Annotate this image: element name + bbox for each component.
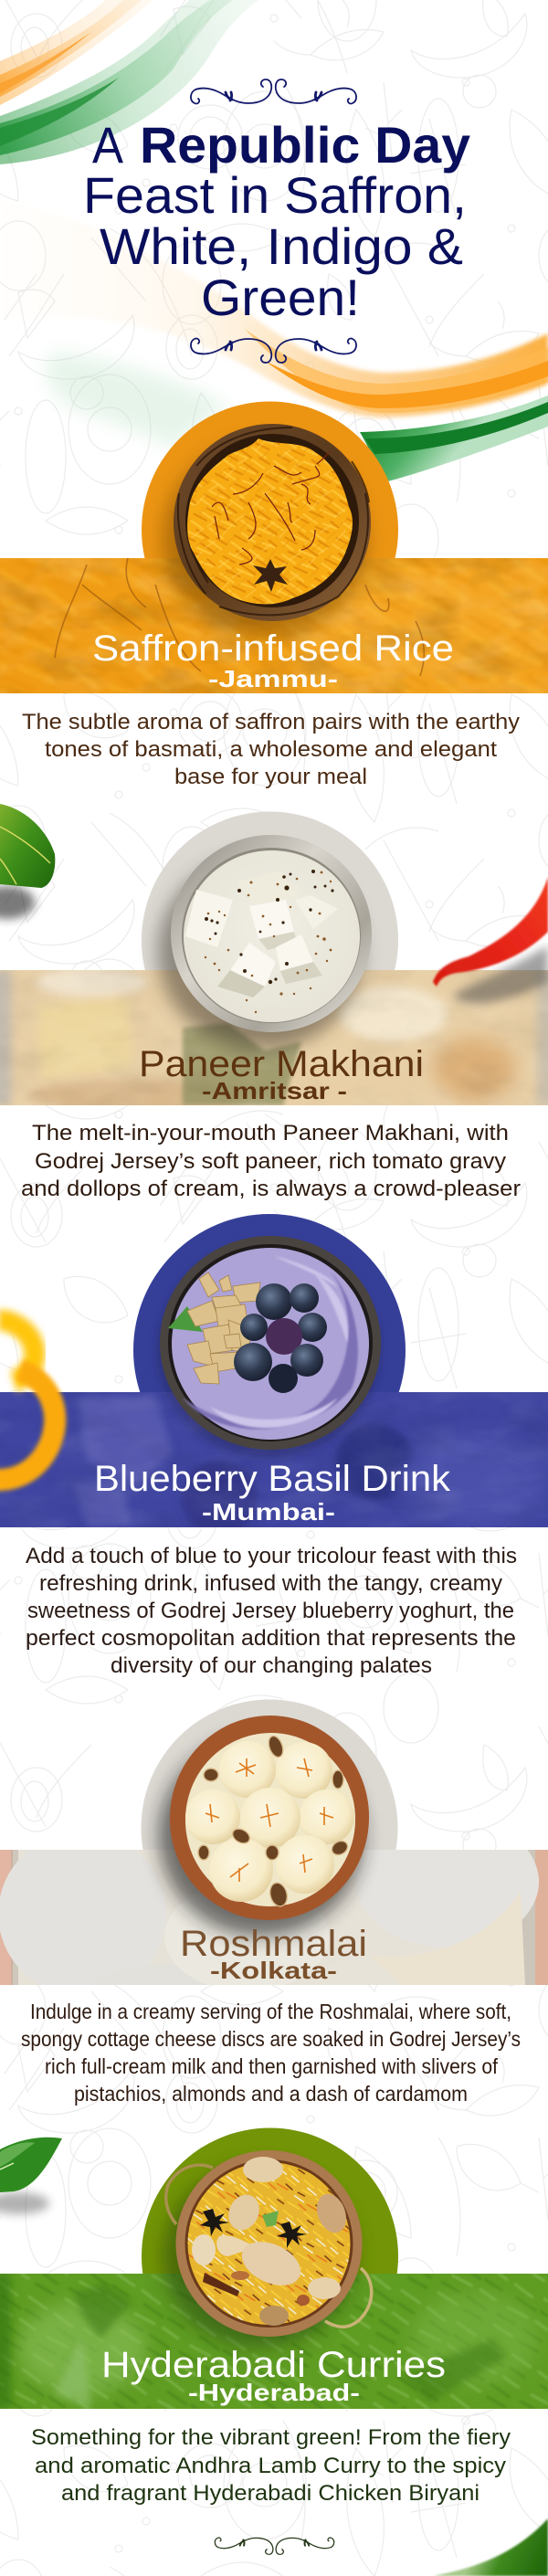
description: The melt-in-your-mouth Paneer Makhani, with — [32, 1121, 509, 1145]
cinnamon stick — [203, 2273, 239, 2296]
description: The subtle aroma of saffron pairs with the earthy — [22, 710, 520, 734]
description: and dollops of cream, is always a crowd-pleaser — [21, 1177, 521, 1201]
icon: red chilli — [433, 877, 548, 1003]
description: Godrej Jersey’s soft paneer, rich tomato gravy — [35, 1149, 506, 1174]
description — [31, 2425, 511, 2506]
bowl: roshmalai — [156, 1703, 383, 1933]
description — [21, 2000, 521, 2106]
cream balls — [185, 1741, 354, 1902]
icon: yellow pepper ring — [0, 1320, 55, 1480]
location: -Hyderabad- — [188, 2379, 360, 2406]
description — [26, 1544, 517, 1678]
blueberries — [234, 1283, 327, 1393]
panel: saffron rice — [0, 402, 548, 789]
bowl shadow — [157, 1242, 380, 1458]
location: -Kolkata- — [210, 1957, 337, 1984]
title — [83, 116, 470, 326]
handles — [166, 2165, 372, 2327]
saffron strands — [206, 1758, 333, 1882]
dish name: Saffron-infused Rice — [92, 628, 454, 669]
dish name: Roshmalai — [180, 1924, 367, 1964]
nuts — [198, 1734, 350, 1908]
backdrop circle — [142, 2128, 398, 2384]
panel: blueberry basil drink — [0, 1214, 548, 1678]
panel: paneer makhani — [0, 811, 548, 1201]
bowl shadow — [158, 855, 363, 1049]
backdrop circle — [142, 402, 398, 658]
title: Green! — [201, 269, 360, 326]
nuts — [231, 2271, 249, 2280]
location: -Jammu- — [208, 665, 338, 692]
description: sweetness of Godrej Jersey blueberry yoghurt, the — [27, 1599, 514, 1623]
star anise — [253, 559, 288, 592]
description: Add a touch of blue to your tricolour feast with this — [26, 1544, 517, 1568]
green corner swoosh — [433, 2518, 548, 2576]
basil leaf — [168, 1306, 203, 1332]
title: Republic Day — [140, 116, 470, 174]
ornament: footer flourish — [215, 2538, 334, 2554]
pepper specks — [205, 870, 334, 1013]
dish name: Blueberry Basil Drink — [94, 1459, 451, 1499]
bowl: saffron rice — [174, 424, 371, 621]
ornament: top flourish — [191, 79, 356, 103]
band: roshmalai texture — [0, 1850, 548, 1985]
band: biryani texture — [0, 2274, 548, 2409]
oats — [187, 1272, 260, 1384]
icon: basil leaf — [0, 804, 55, 919]
description — [22, 710, 520, 789]
title: White, Indigo & — [100, 217, 463, 275]
ornament: lower flourish — [191, 339, 356, 363]
dish name: Hyderabadi Curries — [101, 2345, 446, 2385]
title: A — [92, 116, 124, 174]
backdrop circle — [141, 1699, 398, 1957]
description — [21, 1121, 521, 1201]
location: -Amritsar - — [202, 1077, 347, 1104]
band: makhani gravy texture — [0, 967, 548, 1113]
drumstick — [216, 2233, 308, 2294]
tricolour swoosh: right sweep behind title — [0, 198, 548, 482]
bowl: blueberry yoghurt — [160, 1236, 381, 1450]
backdrop circle — [142, 811, 398, 1069]
description: and fragrant Hyderabadi Chicken Biryani — [61, 2481, 480, 2506]
description: perfect cosmopolitan addition that represents the — [26, 1626, 516, 1651]
description: Something for the vibrant green! From the fiery — [31, 2425, 511, 2450]
description: rich full-cream milk and then garnished with slivers of — [45, 2054, 499, 2078]
location: -Mumbai- — [202, 1498, 335, 1526]
dish name: Paneer Makhani — [139, 1044, 424, 1084]
panel: roshmalai — [0, 1699, 548, 2106]
description: refreshing drink, infused with the tangy, creamy — [39, 1571, 502, 1596]
herb — [262, 2211, 279, 2227]
bowl: paneer — [171, 835, 372, 1032]
bowl shadow — [159, 1736, 364, 1937]
panel: hyderabadi curries — [0, 2128, 548, 2506]
tricolour swoosh: top left — [0, 0, 258, 164]
star anise — [200, 2209, 229, 2236]
description: and aromatic Andhra Lamb Curry to the spicy — [35, 2454, 506, 2478]
band: saffron rice texture — [0, 558, 548, 694]
paneer cubes — [185, 871, 338, 998]
band: blueberry texture — [0, 1392, 548, 1536]
title: Feast in Saffron, — [83, 166, 467, 224]
description: tones of basmati, a wholesome and elegant — [45, 737, 497, 762]
bowl: biryani — [166, 2150, 372, 2337]
backdrop circle — [133, 1214, 406, 1486]
chicken pieces — [192, 2157, 352, 2326]
bowl shadow — [163, 2165, 356, 2348]
icon: green leaf — [0, 2138, 62, 2214]
description: diversity of our changing palates — [111, 1653, 432, 1678]
description: pistachios, almonds and a dash of cardamom — [74, 2082, 468, 2106]
description: base for your meal — [174, 765, 367, 789]
saffron threads — [212, 452, 329, 565]
bowl shadow — [163, 440, 367, 638]
